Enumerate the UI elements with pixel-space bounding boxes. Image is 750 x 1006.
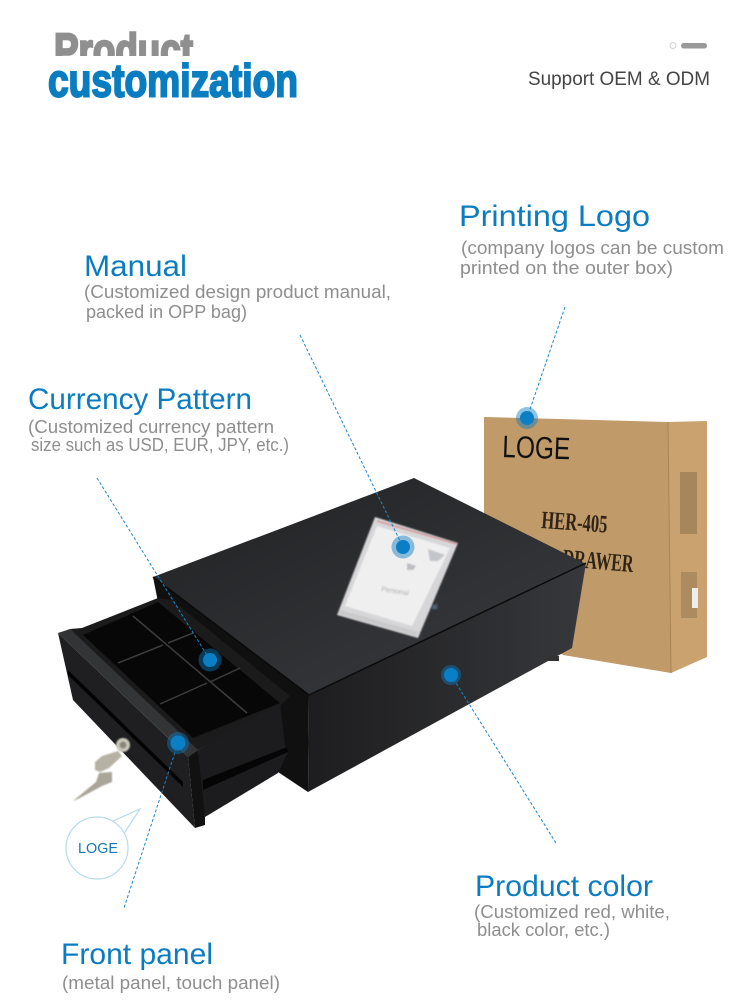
- arrow: currency pattern leader: [97, 478, 210, 660]
- text: manual: Manual: [84, 250, 187, 283]
- cardboard box: DRAWER: [561, 545, 635, 578]
- text: currency pattern: size such as USD, EUR, JPY, etc.): [31, 435, 289, 455]
- text: printing logo: Printing Logo: [459, 200, 650, 233]
- text: front panel: Front panel: [61, 938, 213, 971]
- drawer tray with compartments: [70, 598, 290, 757]
- lock and keys: [73, 738, 130, 801]
- marker: product color: [441, 665, 461, 685]
- text: product color: Product color: [475, 870, 653, 903]
- manual bag: al: [432, 604, 438, 611]
- text: printing logo: (company logos can be custom: [461, 238, 724, 258]
- text: front panel: [61, 938, 280, 993]
- marker: currency pattern: [198, 648, 222, 672]
- title: customization: [48, 54, 298, 106]
- text: product color: black color, etc.): [477, 920, 610, 940]
- marker: printing logo: [516, 407, 538, 429]
- text: currency pattern: [28, 383, 289, 455]
- marker: manual: [392, 536, 414, 558]
- drawer front panel: [58, 629, 205, 828]
- text: product color: (Customized red, white,: [474, 902, 670, 922]
- text: product color: [474, 870, 670, 940]
- manual bag: [337, 517, 458, 638]
- arrow: product color leader: [451, 675, 556, 843]
- text: printing logo: printed on the outer box): [460, 258, 673, 278]
- arrow: front panel leader: [124, 743, 178, 908]
- arrow: manual leader: [300, 335, 403, 547]
- callout: loge badge: [66, 809, 140, 879]
- cardboard box: HER-405: [541, 507, 608, 539]
- tagline: support OEM and ODM: Support OEM & ODM: [528, 69, 710, 90]
- text: manual: packed in OPP bag): [86, 302, 247, 322]
- title: [48, 31, 296, 98]
- text: printing logo: [459, 200, 724, 278]
- cardboard box: LOGE: [502, 429, 571, 466]
- text: manual: [84, 250, 391, 322]
- callout: loge badge: LOGE: [78, 840, 118, 857]
- title: Product: [54, 24, 193, 76]
- cardboard box: [484, 417, 707, 673]
- text: front panel: (metal panel, touch panel): [62, 973, 280, 993]
- drawer body: [153, 478, 586, 792]
- marker: front panel: [167, 732, 189, 754]
- cash drawer: [58, 478, 586, 828]
- drawer side wall: [198, 703, 288, 817]
- arrow: printing logo leader: [527, 307, 565, 418]
- text: manual: (Customized design product manual,: [84, 282, 391, 302]
- manual bag: Personal: [381, 586, 410, 597]
- text: currency pattern: (Customized currency pattern: [28, 417, 274, 437]
- tagline: support OEM and ODM: [528, 42, 710, 90]
- text: currency pattern: Currency Pattern: [28, 383, 252, 416]
